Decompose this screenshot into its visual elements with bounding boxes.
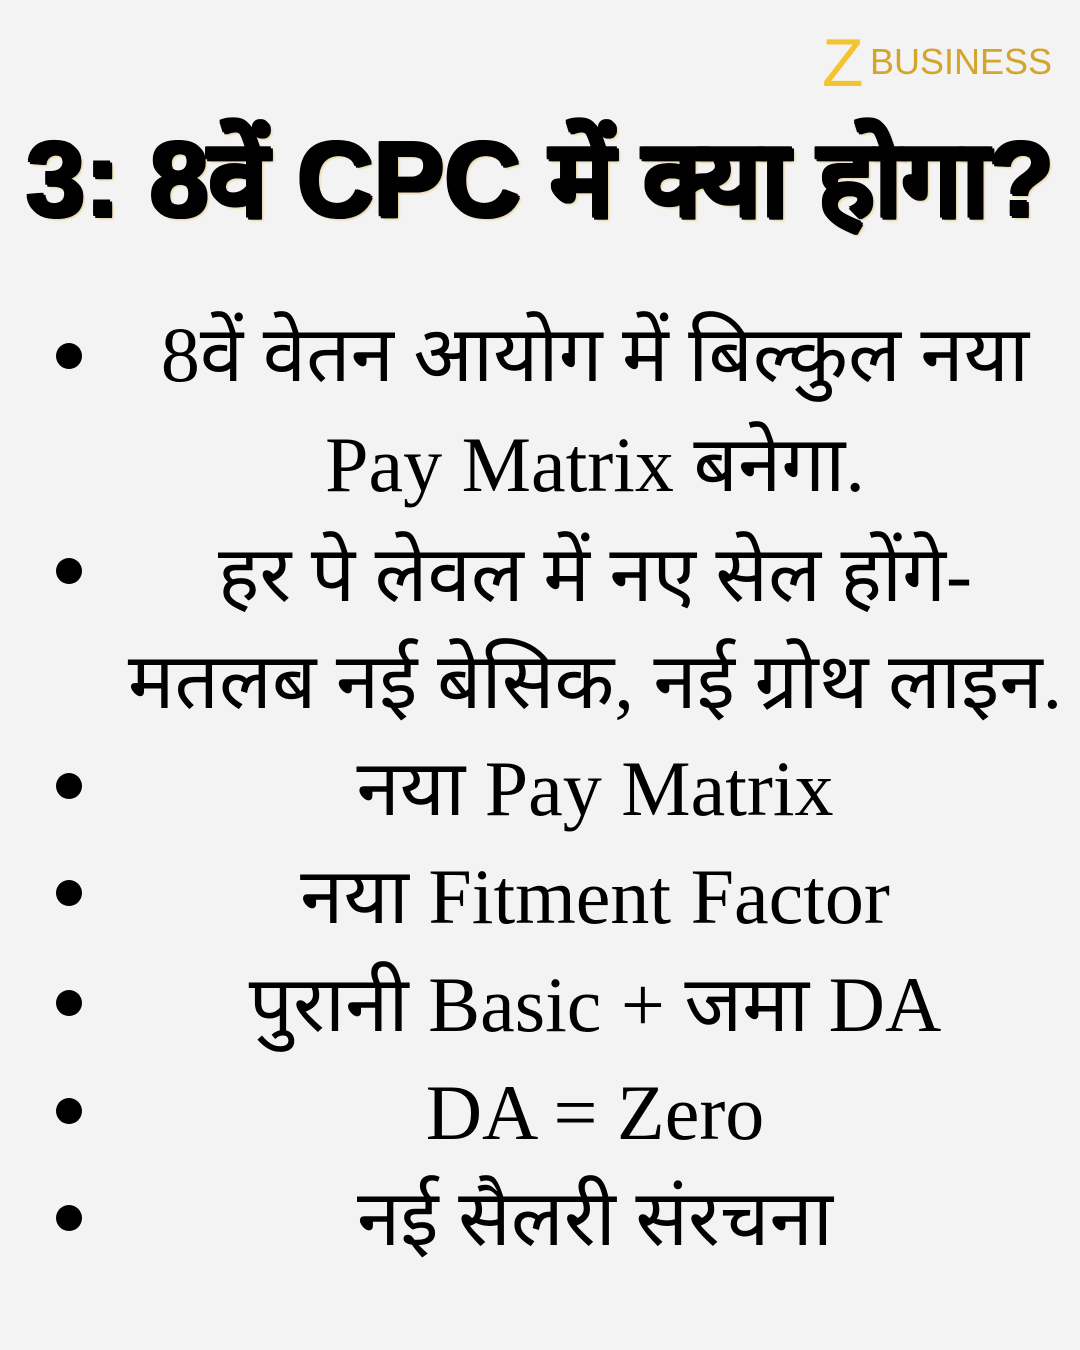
text: नई सैलरी संरचना [357,1175,833,1262]
logo: Z Business: BUSINESS [870,41,1052,82]
text: मतलब नई बेसिक, नई ग्रोथ लाइन. [128,638,1062,725]
text: नया Pay Matrix [356,745,834,832]
title: 3: 8वें CPC में क्या होगा? [26,121,1054,239]
logo: Z Business [822,28,1052,94]
bullet 2 [56,531,1062,725]
bullet 6 [56,1069,764,1156]
bullet 1 [56,311,1030,508]
text: Pay Matrix बनेगा. [325,421,865,508]
bullet 3 [56,745,834,832]
bullet 4 [56,853,890,940]
text: हर पे लेवल में नए सेल होंगे- [218,531,972,618]
bullet list [56,311,1062,1262]
text: DA = Zero [426,1069,764,1156]
bullet 5 [56,961,941,1052]
text: 8वें वेतन आयोग में बिल्कुल नया [161,311,1029,398]
text: नया Fitment Factor [300,853,890,940]
text: पुरानी Basic + जमा DA [249,961,941,1048]
bullet 7 [56,1175,834,1262]
